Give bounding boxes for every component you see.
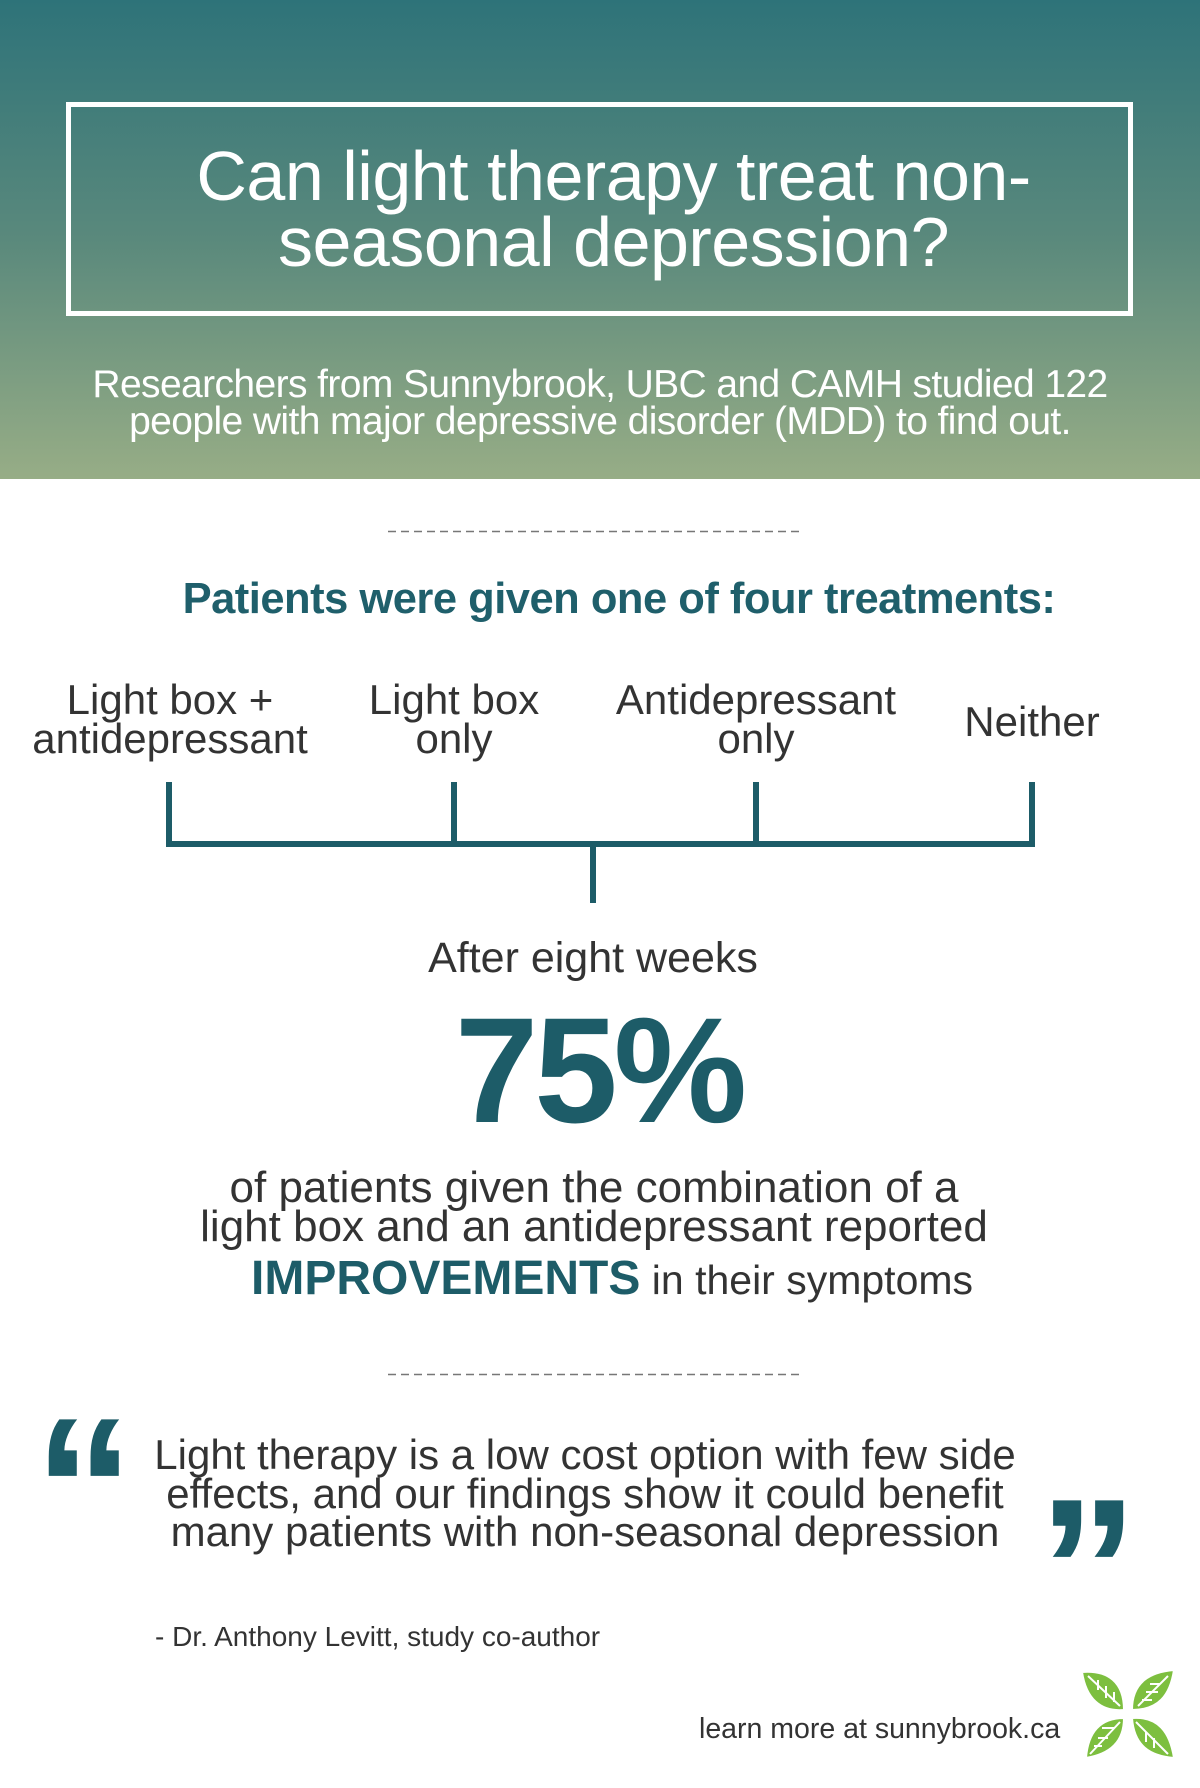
label: light box + antidepressant: Light box + — [67, 676, 273, 723]
stat description: of patients given the combination of a — [230, 1163, 958, 1212]
stat description: light box and an antidepressant reported — [200, 1202, 988, 1251]
label: neither: Neither — [964, 698, 1100, 745]
title: Can light therapy treat non- — [196, 137, 1031, 215]
subtitle: people with major depressive disorder (MDD) to find out. — [129, 400, 1071, 443]
title — [196, 137, 1031, 281]
label: antidepressant only — [616, 676, 896, 762]
subtitle — [92, 363, 1108, 443]
label: light box only — [369, 676, 539, 762]
label: antidepressant only: Antidepressant — [616, 676, 896, 723]
improvements line: IMPROVEMENTS in their symptoms — [251, 1252, 973, 1305]
stat description — [200, 1163, 988, 1251]
icon: close quote: ” — [1038, 1458, 1138, 1681]
label: light box only: Light box — [369, 676, 539, 723]
quote text — [154, 1431, 1016, 1555]
quote text: effects, and our findings show it could benefit — [166, 1470, 1004, 1516]
subtitle: Researchers from Sunnybrook, UBC and CAMH studied 122 — [92, 363, 1108, 406]
heading: treatments: Patients were given one of four treatments: — [183, 575, 1055, 623]
dashed divider — [388, 530, 799, 532]
label: antidepressant only: only — [717, 715, 795, 762]
header band — [0, 0, 1200, 479]
label: light box only: only — [415, 715, 493, 762]
quote text: many patients with non-seasonal depression — [171, 1508, 999, 1555]
big stat 75%: 75% — [455, 986, 743, 1154]
bracket connector — [166, 782, 1035, 903]
title: seasonal depression? — [278, 203, 949, 281]
label: light box + antidepressant: antidepressant — [32, 715, 308, 762]
title box — [66, 102, 1133, 316]
after eight weeks: After eight weeks — [428, 934, 758, 982]
attribution: - Dr. Anthony Levitt, study co-author — [155, 1621, 600, 1652]
icon: open quote: “ — [34, 1377, 134, 1600]
label: light box + antidepressant — [32, 676, 308, 762]
logo: leaves — [1082, 1671, 1173, 1757]
quote text: Light therapy is a low cost option with few side — [154, 1431, 1016, 1478]
treatment labels — [32, 676, 1100, 762]
dashed divider — [388, 1374, 799, 1376]
footer link: learn more at sunnybrook.ca — [699, 1713, 1060, 1745]
